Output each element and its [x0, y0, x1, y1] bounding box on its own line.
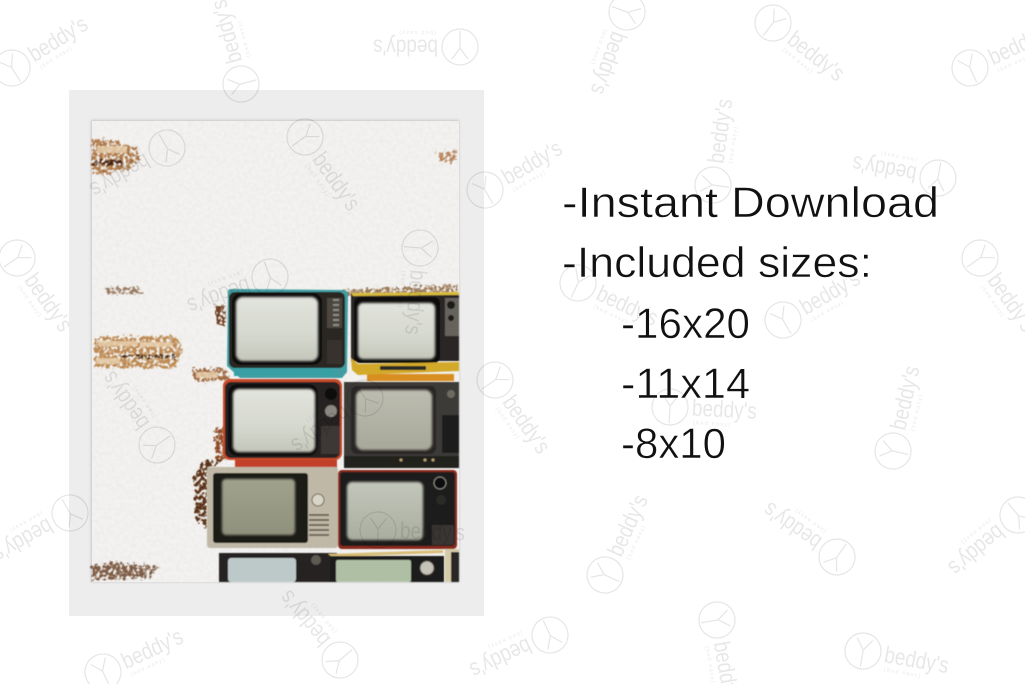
- watermark 2: [201, 0, 263, 106]
- watermark 14: {bed easy}: [397, 270, 406, 309]
- watermark 8: [280, 112, 370, 218]
- watermark 6: [946, 15, 1025, 92]
- watermark 4: {bed easy}: [589, 28, 608, 66]
- watermark 32: {bed easy}: [884, 667, 922, 679]
- line: instant download: -Instant Download: [562, 179, 939, 227]
- watermark 21: {bed easy}: [693, 420, 731, 428]
- watermark 18: beddy's: [886, 364, 925, 432]
- watermark 7: beddy's: [85, 148, 154, 202]
- watermark 24: [359, 511, 465, 551]
- watermark 7: [83, 123, 192, 207]
- watermark 1: beddy's: [24, 11, 92, 67]
- watermark 32: beddy's: [882, 643, 951, 679]
- line: included sizes: -Included sizes:: [562, 239, 872, 287]
- watermark 16: [758, 261, 867, 345]
- watermark 23: beddy's: [286, 400, 354, 458]
- picture frame: [69, 90, 484, 616]
- watermark 2: {bed easy}: [237, 19, 252, 58]
- watermark 5: beddy's: [782, 27, 849, 87]
- watermark 30: beddy's: [118, 624, 187, 674]
- watermark 31: beddy's: [275, 585, 336, 651]
- watermark 23: [284, 373, 390, 463]
- framed photo: retro televisions on a brick wall: [92, 121, 459, 582]
- watermark 7: {bed easy}: [104, 144, 140, 169]
- tv: red: [223, 379, 342, 468]
- watermark 10: beddy's: [704, 97, 738, 165]
- watermark 13: [182, 254, 293, 324]
- watermark 10: [693, 96, 743, 205]
- watermark 20: beddy's: [97, 366, 155, 434]
- product details text block: [562, 179, 939, 468]
- tv: dark grey: [344, 382, 459, 468]
- watermark 25: [581, 489, 658, 599]
- watermark 17: [955, 233, 1025, 339]
- white plaster wall: [92, 121, 459, 582]
- watermark 17: {bed easy}: [979, 285, 1006, 319]
- watermark 19: beddy's: [497, 391, 555, 459]
- watermark 19: [470, 355, 560, 461]
- watermark 22: [0, 488, 95, 572]
- watermark 31: [270, 582, 365, 684]
- watermark 23: {bed easy}: [304, 397, 338, 424]
- watermark 28: [464, 611, 574, 684]
- watermark 12: [0, 233, 82, 339]
- watermark 14: beddy's: [400, 269, 430, 336]
- watermark 5: [748, 0, 853, 91]
- watermark 8: beddy's: [307, 148, 365, 216]
- watermark 15: beddy's: [593, 281, 662, 331]
- watermark 4: beddy's: [585, 28, 631, 98]
- watermark 5: {bed easy}: [781, 47, 814, 75]
- watermark 9: {bed easy}: [512, 169, 548, 194]
- watermark 32: [842, 630, 952, 684]
- frame inner shadow: [91, 120, 459, 582]
- watermark 11: beddy's: [850, 150, 919, 186]
- watermark 12: beddy's: [19, 269, 77, 337]
- watermark 29: {bed easy}: [703, 646, 716, 684]
- television stack: [207, 289, 459, 582]
- watermark 14: [394, 228, 440, 336]
- watermark 16: {bed easy}: [810, 299, 846, 324]
- watermark 18: {bed easy}: [910, 393, 924, 432]
- watermark 24: beddy's: [400, 518, 465, 546]
- watermark 9: beddy's: [498, 136, 567, 190]
- watermark 9: [460, 131, 569, 215]
- watermark 1: [0, 7, 95, 93]
- tv: yellow: [351, 292, 459, 381]
- watermark 27: {bed easy}: [959, 517, 992, 546]
- watermark 30: [79, 619, 189, 684]
- watermark 15: [554, 259, 664, 336]
- watermark 19: {bed easy}: [494, 407, 521, 441]
- watermark 26: {bed easy}: [793, 507, 828, 533]
- watermark 13: {bed easy}: [206, 268, 243, 287]
- watermark 21: [651, 388, 758, 430]
- watermark 16: beddy's: [796, 266, 865, 320]
- tv: teal: [227, 289, 348, 378]
- watermark 11: [849, 145, 959, 199]
- watermark 31: {bed easy}: [309, 601, 338, 634]
- line: size 16x20: -16x20: [621, 300, 750, 348]
- tv: bottom row: [219, 549, 459, 582]
- watermark 4: [580, 0, 650, 100]
- line: size 8x10: -8x10: [621, 420, 726, 468]
- watermark 25: {bed easy}: [626, 524, 648, 561]
- watermark 27: beddy's: [943, 519, 1009, 580]
- watermark 21: beddy's: [691, 396, 757, 424]
- watermark 26: [756, 492, 862, 582]
- watermark 28: {bed easy}: [486, 629, 523, 650]
- watermark 30: {bed easy}: [130, 657, 167, 678]
- watermark 25: beddy's: [603, 491, 653, 560]
- watermark 10: {bed easy}: [728, 125, 739, 164]
- watermark 13: beddy's: [184, 273, 254, 318]
- watermark 3: {bed easy}: [398, 29, 436, 35]
- tv: black: [338, 470, 457, 549]
- brick mortar details: [96, 146, 218, 378]
- watermark 27: [940, 490, 1025, 585]
- wall texture: [92, 121, 459, 582]
- exposed brick patches: [92, 138, 458, 581]
- watermark 1: {bed easy}: [39, 45, 74, 71]
- watermark 24: {bed easy}: [401, 543, 440, 550]
- watermark 28: beddy's: [466, 633, 535, 683]
- watermark 18: [871, 362, 930, 473]
- watermark 3: beddy's: [373, 34, 438, 59]
- watermark 11: {bed easy}: [879, 150, 917, 162]
- tv: beige: [207, 467, 338, 548]
- watermark 8: {bed easy}: [304, 164, 331, 198]
- watermark 22: {bed easy}: [7, 509, 43, 534]
- watermark 26: beddy's: [759, 497, 826, 555]
- line: size 11x14: -11x14: [621, 360, 750, 408]
- watermark 29: [696, 599, 750, 684]
- watermark 20: {bed easy}: [131, 384, 158, 418]
- watermark 20: [92, 364, 182, 470]
- watermark 3: [373, 29, 478, 65]
- watermark 12: {bed easy}: [16, 285, 43, 319]
- watermark 15: {bed easy}: [592, 304, 629, 326]
